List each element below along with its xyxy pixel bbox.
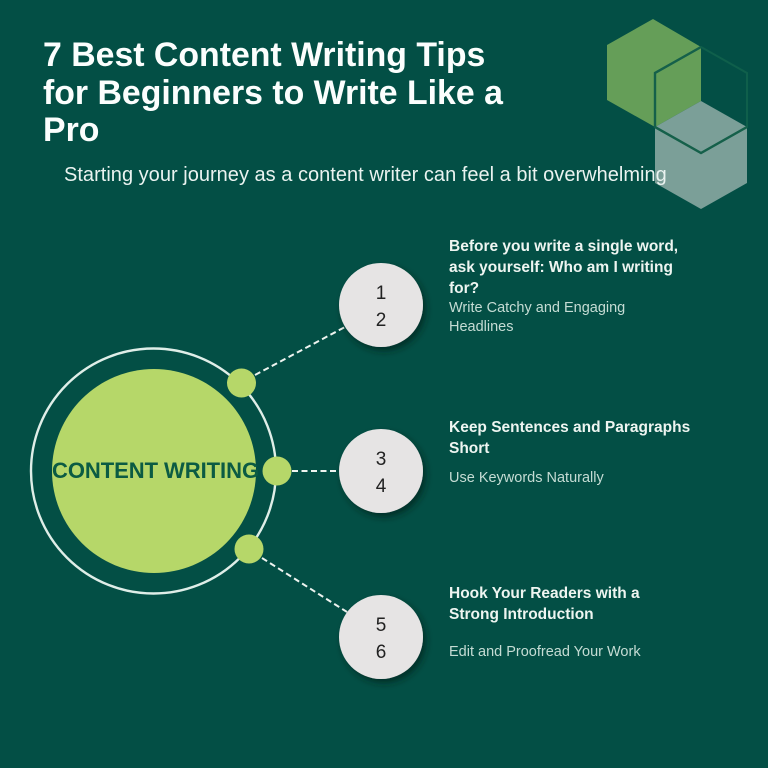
tip body 6: Edit and Proofread Your Work bbox=[449, 644, 641, 660]
tip body 2: Write Catchy and Engaging bbox=[449, 300, 625, 316]
node numbers 1 2: 2 bbox=[376, 310, 386, 330]
subtitle: Starting your journey as a content writer can feel a bit overwhelming bbox=[64, 164, 667, 186]
tip heading 1 bbox=[449, 238, 678, 297]
node numbers 5 6: 5 bbox=[376, 615, 386, 636]
tip body 2: Headlines bbox=[449, 319, 514, 335]
tip heading 1: for? bbox=[449, 280, 479, 297]
center label: CONTENT WRITING bbox=[52, 458, 259, 483]
node numbers 3 4: 3 bbox=[376, 449, 386, 470]
tip body 4: Use Keywords Naturally bbox=[449, 470, 604, 486]
title: Pro bbox=[43, 111, 99, 149]
tip heading 3: Short bbox=[449, 440, 489, 457]
node numbers 5 6 bbox=[376, 615, 386, 662]
tip heading 5 bbox=[449, 585, 640, 623]
title: for Beginners to Write Like a bbox=[43, 74, 503, 112]
tip heading 5: Hook Your Readers with a bbox=[449, 585, 640, 602]
tip heading 1: Before you write a single word, bbox=[449, 238, 678, 255]
node numbers 5 6: 6 bbox=[376, 642, 386, 662]
tip heading 5: Strong Introduction bbox=[449, 606, 594, 623]
node numbers 1 2: 1 bbox=[376, 283, 386, 304]
tip body 2 bbox=[449, 300, 625, 335]
node numbers 3 4 bbox=[376, 449, 386, 496]
title: 7 Best Content Writing Tips bbox=[43, 36, 485, 74]
node numbers 1 2 bbox=[376, 283, 386, 330]
tip heading 1: ask yourself: Who am I writing bbox=[449, 259, 673, 276]
tip heading 3 bbox=[449, 419, 690, 457]
tip heading 3: Keep Sentences and Paragraphs bbox=[449, 419, 690, 436]
title bbox=[43, 36, 504, 149]
node numbers 3 4: 4 bbox=[376, 476, 386, 496]
